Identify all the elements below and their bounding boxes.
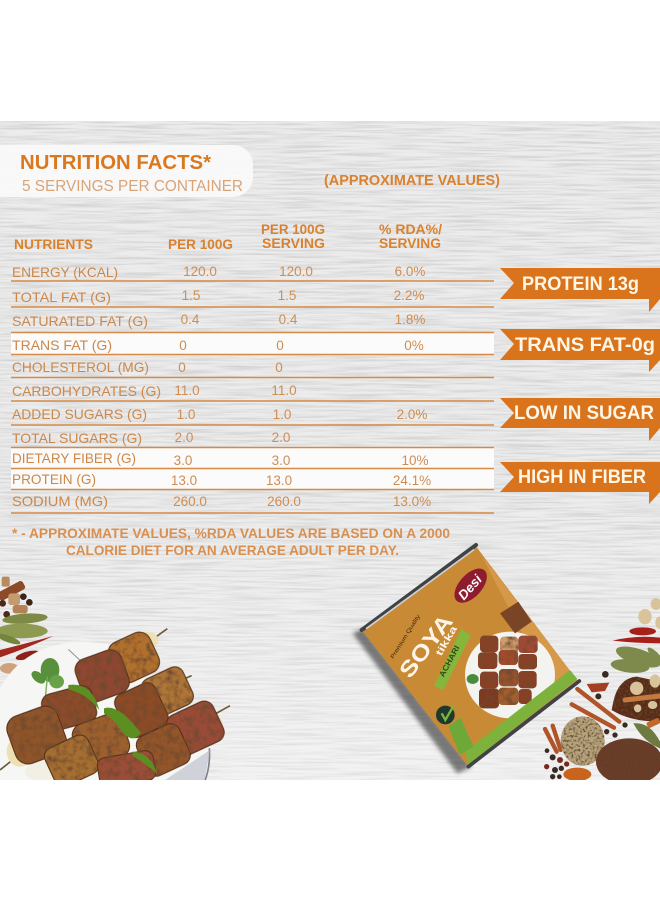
row: protein: PROTEIN (G) — [12, 471, 96, 487]
spices: cinnamon bark — [587, 683, 609, 692]
row: added sugars: 1.0 — [177, 407, 195, 422]
approximate values note: (APPROXIMATE VALUES) — [324, 172, 500, 189]
row: total sugars: 2.0 — [272, 430, 290, 445]
ribbon: low in sugar: LOW IN SUGAR — [514, 403, 654, 424]
row: sodium: SODIUM (MG) — [12, 493, 108, 509]
footnote: CALORIE DIET FOR AN AVERAGE ADULT PER DAY. — [66, 543, 399, 558]
row: protein: 24.1% — [393, 473, 431, 488]
ribbon: trans fat — [500, 329, 660, 372]
photo: left spices and kebab plate — [0, 545, 660, 790]
ribbon: high in fiber: HIGH IN FIBER — [518, 467, 646, 488]
can: achari strip — [434, 628, 471, 690]
can: soya title: Premium Quality — [390, 614, 422, 660]
wood background — [0, 121, 660, 780]
spices: orange chip — [646, 718, 660, 728]
spices: chillies — [613, 627, 660, 643]
ribbon: trans fat: TRANS FAT-0g — [515, 335, 655, 356]
table header: PER 100G — [168, 237, 233, 252]
row: dietary fiber: 10% — [401, 453, 429, 468]
can: cilantro — [467, 674, 479, 684]
spices: orange powder — [563, 768, 591, 781]
can: plate on label — [465, 632, 555, 718]
ribbon: high in fiber — [500, 462, 660, 504]
row: trans fat: 0 — [179, 338, 187, 353]
row: energy: 120.0 — [183, 264, 217, 279]
row: carbohydrates: 11.0 — [271, 383, 297, 398]
row: sodium: 260.0 — [267, 494, 301, 509]
row: total fat: 2.2% — [394, 288, 424, 303]
row: cholesterol: 0 — [275, 360, 283, 375]
row: energy: 120.0 — [279, 264, 313, 279]
can: kebab pieces — [478, 636, 538, 708]
can: veg badge — [436, 705, 455, 724]
row: protein: 13.0 — [266, 473, 292, 488]
row: energy: ENERGY (KCAL) — [12, 264, 118, 280]
row: total fat — [12, 288, 424, 305]
row: dietary fiber: 3.0 — [272, 453, 290, 468]
icon: kebab pieces — [3, 628, 227, 790]
ribbon: protein: PROTEIN 13g — [522, 274, 639, 295]
icon: right spices — [544, 598, 660, 785]
icon: skewers — [0, 629, 230, 770]
footnote — [12, 526, 450, 558]
can: wood block — [500, 602, 532, 633]
product can — [362, 545, 579, 767]
spices: green leaves — [633, 723, 660, 748]
spices: cinnamon sticks — [545, 689, 660, 752]
row: carbohydrates: CARBOHYDRATES (G) — [12, 383, 161, 399]
row: dietary fiber — [12, 450, 429, 468]
spices: pepper mound — [596, 738, 660, 780]
row: cholesterol: CHOLESTEROL (MG) — [12, 359, 149, 375]
spices: dark masala patch — [612, 677, 660, 722]
row: energy — [12, 264, 425, 280]
row: energy: 6.0% — [395, 264, 425, 279]
row: carbohydrates — [12, 383, 297, 399]
row: saturated fat: 0.4 — [279, 312, 298, 327]
footnote: * - APPROXIMATE VALUES, %RDA VALUES ARE BASED ON A 2000 — [12, 526, 450, 541]
row: protein — [12, 471, 431, 488]
icon: green peppers — [68, 685, 157, 774]
table header — [14, 222, 442, 252]
table header: SERVING — [262, 236, 325, 251]
row: trans fat: 0 — [276, 338, 284, 353]
can: brand logo: Desi — [455, 572, 485, 603]
row: sodium: 260.0 — [173, 494, 207, 509]
row: saturated fat — [12, 312, 425, 329]
row: carbohydrates: 11.0 — [174, 383, 200, 398]
can: soya title: SOYA — [394, 609, 458, 683]
row: sodium — [12, 493, 431, 509]
row: total sugars: 2.0 — [175, 430, 193, 445]
icon: plate — [0, 642, 210, 783]
ribbon: protein — [500, 268, 660, 312]
spices: peppercorns — [544, 671, 628, 779]
row: total fat: 1.5 — [182, 288, 200, 303]
title pill: 5 SERVINGS PER CONTAINER — [22, 178, 243, 195]
can: veg tag — [448, 718, 473, 755]
can: soya title: tikka — [434, 624, 460, 658]
row: added sugars — [12, 406, 427, 422]
spices: nuts — [630, 598, 660, 712]
row: total fat: TOTAL FAT (G) — [12, 289, 111, 305]
table header: PER 100G — [261, 222, 325, 237]
icon: cilantro garnish — [32, 658, 64, 696]
icon: left spices — [0, 577, 53, 674]
table header: % RDA%/ — [379, 222, 442, 237]
row: added sugars: ADDED SUGARS (G) — [12, 406, 147, 422]
icon: onion pieces — [7, 632, 223, 782]
row: cholesterol: 0 — [178, 360, 186, 375]
row: sodium: 13.0% — [393, 494, 431, 509]
row: saturated fat: 0.4 — [181, 312, 200, 327]
can: green band — [465, 670, 577, 764]
spices: cumin powder mound — [561, 716, 605, 766]
can: achari strip: ACHARI — [437, 644, 462, 679]
row: cholesterol — [12, 359, 283, 375]
row: trans fat — [12, 337, 424, 353]
nutrition table — [11, 222, 494, 513]
row: protein: 13.0 — [171, 473, 197, 488]
title pill: NUTRITION FACTS* — [20, 152, 211, 174]
row: dietary fiber: 3.0 — [174, 453, 192, 468]
row: saturated fat: SATURATED FAT (G) — [12, 313, 148, 329]
row: trans fat: TRANS FAT (G) — [12, 337, 112, 353]
row: saturated fat: 1.8% — [395, 312, 425, 327]
row: trans fat: 0% — [404, 338, 424, 353]
can: lighter right side — [482, 555, 578, 698]
row: total sugars — [12, 430, 290, 446]
can: top and bottom rims — [362, 545, 579, 767]
row: added sugars: 2.0% — [397, 407, 427, 422]
title pill — [0, 145, 253, 197]
row: total fat: 1.5 — [278, 288, 296, 303]
table header: SERVING — [379, 236, 441, 251]
row: added sugars: 1.0 — [273, 407, 291, 422]
table header: NUTRIENTS — [14, 237, 93, 252]
row: dietary fiber: DIETARY FIBER (G) — [12, 450, 136, 466]
icon: can shadow — [353, 628, 472, 773]
spices: bay leaves — [610, 646, 660, 673]
row: total sugars: TOTAL SUGARS (G) — [12, 430, 142, 446]
ribbon: low in sugar — [500, 398, 660, 441]
